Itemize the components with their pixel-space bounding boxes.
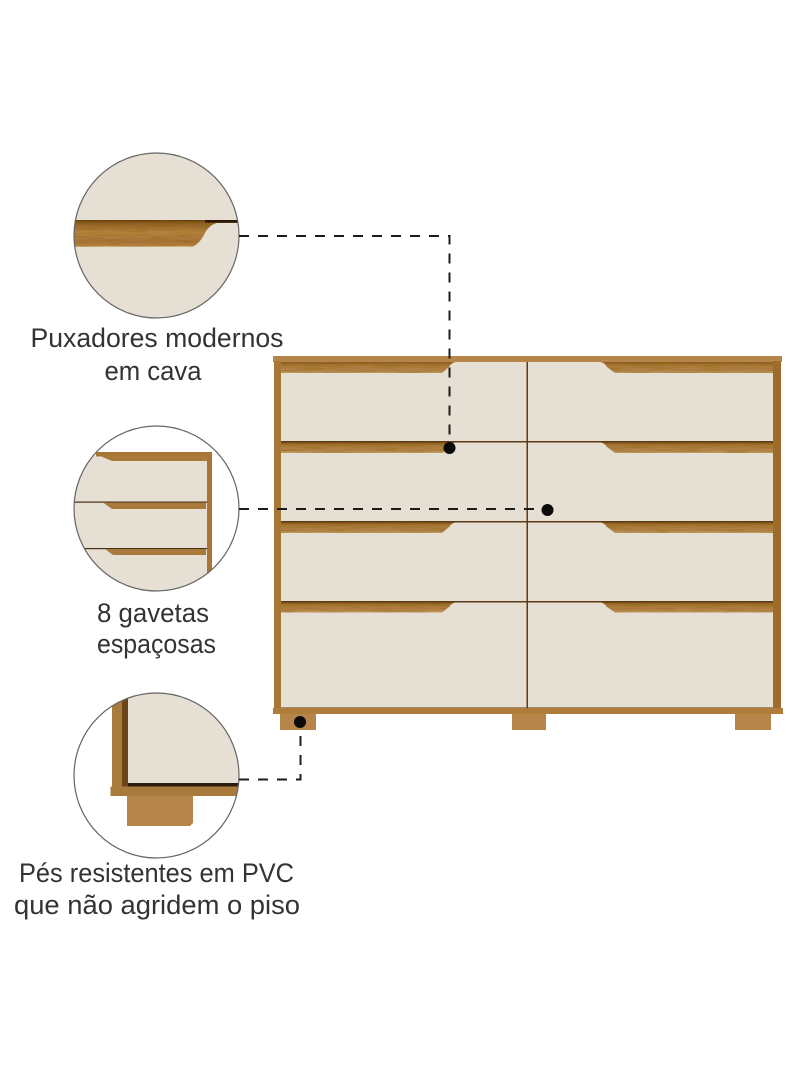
magnifier circle: drawers (70, 426, 239, 596)
handle recesses (281, 362, 773, 613)
drawer 2 left (281, 442, 526, 521)
drawer 4 right (528, 602, 773, 708)
cabinet frame (273, 356, 783, 714)
callout 3: feet detail (14, 690, 306, 920)
drawer 3 left (281, 522, 526, 601)
label: feet: Pés resistentes em PVC (19, 858, 294, 888)
callout 1: handle detail (30, 153, 456, 454)
marker dot: feet (294, 716, 306, 728)
label: drawers: espaçosas (97, 629, 216, 659)
drawer 1 right (528, 362, 773, 441)
label: drawers: 8 gavetas (97, 598, 209, 628)
magnifier circle: handle (70, 153, 241, 318)
label: feet (14, 858, 300, 920)
infographic canvas (15, 152, 783, 920)
label: handle: Puxadores modernos (30, 323, 284, 353)
drawer 2 right (528, 442, 773, 521)
label: drawers (97, 598, 216, 659)
label: feet: que não agridem o piso (14, 890, 300, 920)
dresser (273, 356, 783, 730)
dashed leader: feet (239, 736, 300, 780)
magnifier circle: feet (74, 690, 243, 858)
drawer 4 left (281, 602, 526, 708)
marker dot: drawers (542, 504, 554, 516)
callout 2: drawers detail (70, 426, 554, 659)
dashed leader: handle (239, 236, 450, 442)
feet (280, 714, 771, 730)
right drawer column (528, 362, 773, 708)
label: handle: em cava (104, 356, 202, 386)
label: handle (30, 323, 284, 386)
left drawer column (281, 362, 526, 708)
drawer 1 left (281, 362, 526, 441)
marker dot: handle (444, 442, 456, 454)
dashed leader: drawers (239, 508, 541, 510)
drawer 3 right (528, 522, 773, 601)
